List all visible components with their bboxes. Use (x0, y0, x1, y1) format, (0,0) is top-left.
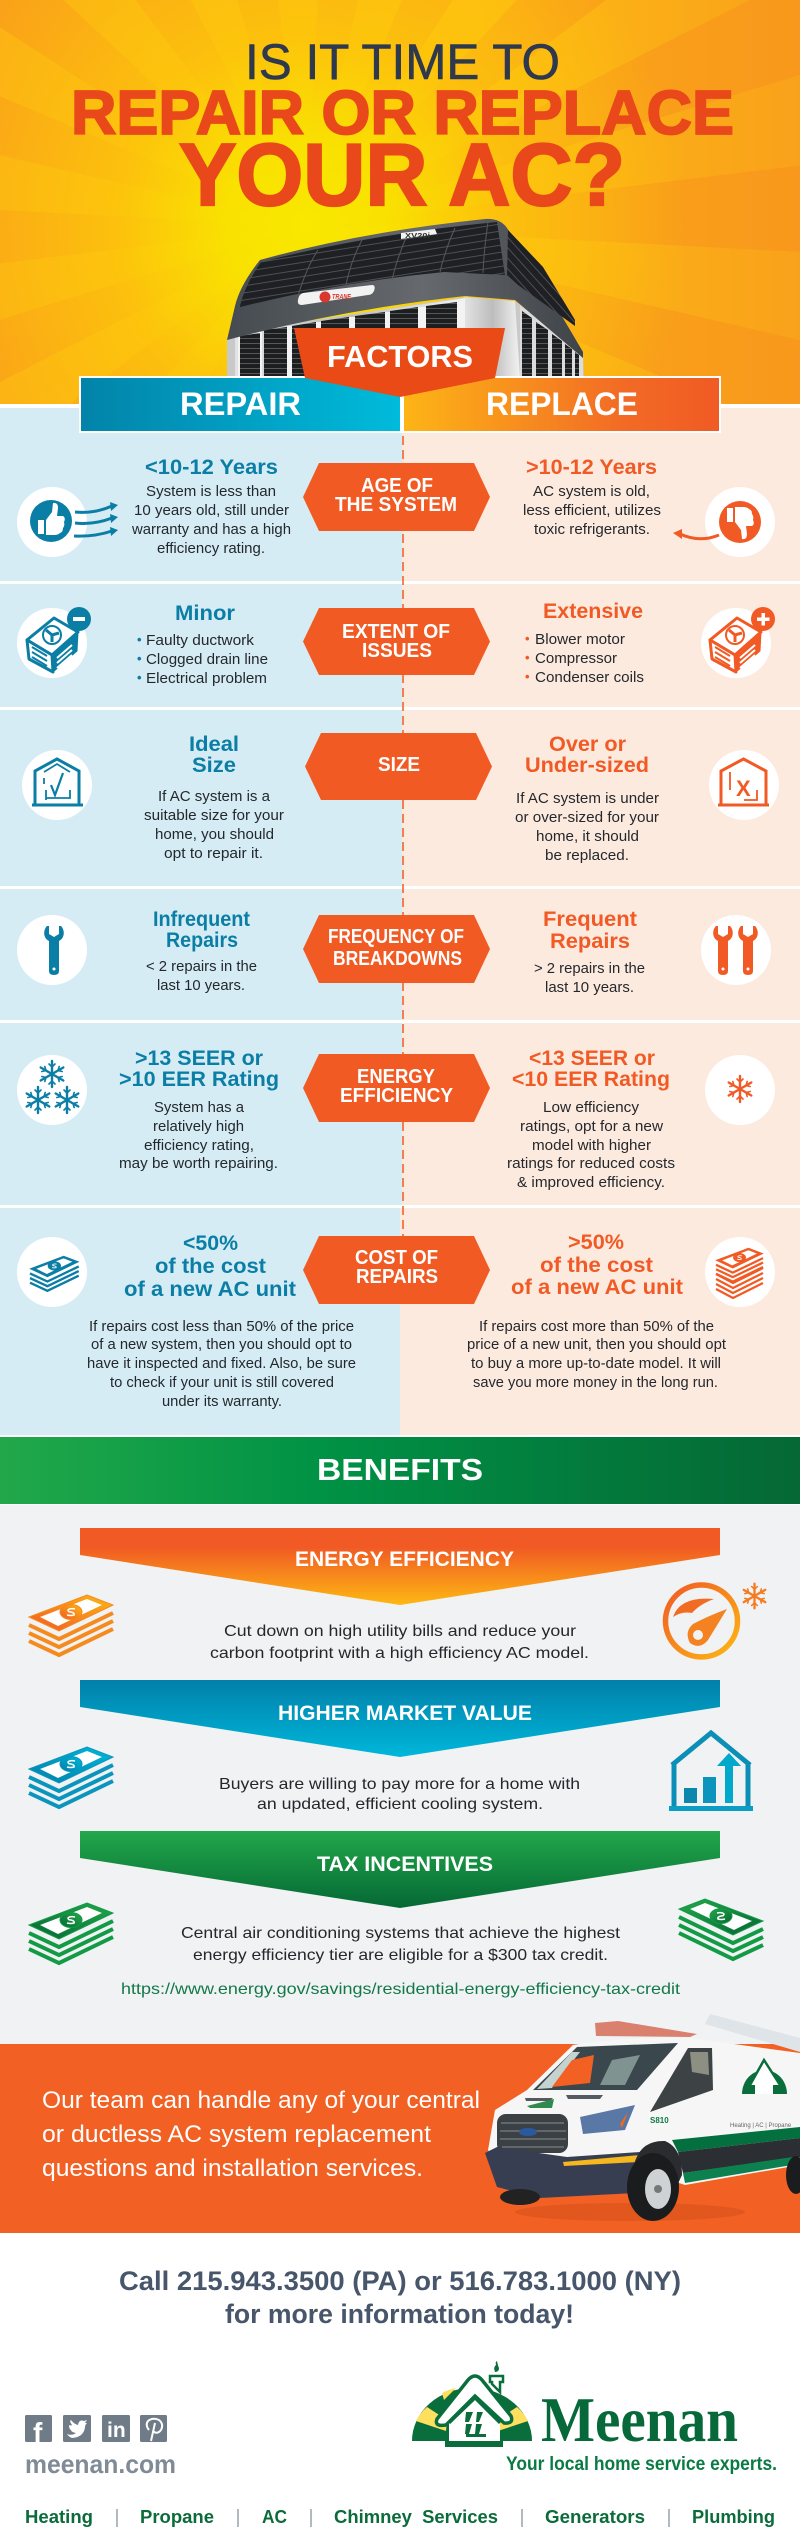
replace description: save you more money in the long run. (473, 1374, 718, 1391)
row: energy efficiency (17, 1047, 775, 1191)
replace description: to buy a more up-to-date model. It will (471, 1355, 721, 1372)
icon: pinterest (140, 2415, 167, 2442)
repair heading: Repairs (166, 929, 238, 952)
benefit description: carbon footprint with a high efficiency AC model. (210, 1645, 589, 1662)
repair description: If repairs cost less than 50% of the price (89, 1318, 354, 1335)
row: age of the system (17, 456, 775, 557)
replace description: toxic refrigerants. (534, 521, 650, 538)
team message (42, 2087, 480, 2182)
benefit description (210, 1623, 589, 1662)
benefit: tax incentives (29, 1831, 763, 1998)
repair description: System has a (154, 1099, 245, 1116)
repair heading: <50% (183, 1232, 238, 1255)
icon: single wrench (17, 915, 87, 985)
icon: house X: X (736, 776, 751, 801)
repair heading (153, 908, 250, 952)
repair header (80, 377, 401, 432)
repair description: suitable size for your (144, 807, 284, 824)
factor: extent of issues: ISSUES (362, 640, 432, 662)
repair heading: Minor (175, 602, 235, 625)
replace description: home, it should (536, 828, 639, 845)
repair description: relatively high (153, 1118, 244, 1135)
replace description: price of a new unit, then you should opt (467, 1336, 727, 1353)
row: size (22, 733, 779, 864)
website: meenan.com (25, 2449, 176, 2479)
replace list: Compressor (535, 650, 617, 667)
icon: linkedin: in (107, 2419, 126, 2442)
AC unit illustration: TRANE (332, 294, 351, 301)
replace heading: Frequent (543, 908, 637, 931)
icon: house check (22, 750, 92, 820)
services navigation: Heating (25, 2507, 93, 2527)
icon: green cash right (679, 1899, 763, 1959)
repair description: under its warranty. (162, 1393, 282, 1410)
repair description: of a new system, then you should opt to (91, 1336, 352, 1353)
hero sunburst background (0, 0, 800, 404)
repair description: 10 years old, still under (134, 502, 289, 519)
arrow banner (80, 1680, 720, 1757)
repair description: may be worth repairing. (119, 1155, 278, 1172)
repair description (87, 1318, 356, 1410)
replace heading: of a new AC unit (511, 1276, 683, 1299)
factor: extent of issues: EXTENT OF (342, 621, 450, 643)
benefit description: Cut down on high utility bills and reduce your (224, 1623, 577, 1640)
icon: facebook: f (33, 2417, 43, 2448)
repair heading (189, 733, 239, 777)
factor: extent of issues (303, 608, 490, 675)
icon: three snowflakes (17, 1055, 87, 1125)
services navigation: Generators (545, 2507, 645, 2527)
repair label: REPAIR (180, 386, 301, 422)
replace heading (512, 1047, 670, 1091)
repair list: Electrical problem (146, 670, 267, 687)
repair description (146, 958, 257, 994)
benefit title: TAX INCENTIVES (317, 1853, 493, 1876)
benefit description: an updated, efficient cooling system. (257, 1796, 543, 1813)
replace header (403, 377, 720, 432)
icon: large cash stack (705, 1237, 775, 1307)
Meenan logo (412, 2361, 777, 2475)
call to action: Call 215.943.3500 (PA) or 516.783.1000 (NY) (119, 2266, 681, 2296)
icon: linkedin (102, 2415, 130, 2442)
factor: energy efficiency (303, 1054, 490, 1122)
call to action (119, 2266, 681, 2329)
factor: frequency of breakdowns: FREQUENCY OF (328, 926, 464, 948)
replace list: • (525, 669, 530, 684)
service van: S810 (650, 2116, 669, 2125)
services navigation: AC (262, 2507, 287, 2527)
replace heading: Extensive (543, 600, 643, 623)
factor: energy efficiency: ENERGY (357, 1066, 436, 1088)
replace description: & improved efficiency. (517, 1174, 665, 1191)
call to action: for more information today! (225, 2299, 574, 2329)
icon: AC unit plus (701, 607, 775, 678)
factor: cost of repairs: COST OF (355, 1247, 438, 1269)
benefits banner (0, 1437, 800, 1504)
services navigation: Plumbing (692, 2507, 775, 2527)
factor: age of the system: THE SYSTEM (335, 494, 457, 516)
repair heading: Ideal (189, 733, 239, 756)
replace label: REPLACE (486, 386, 638, 422)
factors pennant (294, 328, 505, 397)
replace heading (525, 733, 649, 777)
repair description (131, 483, 291, 557)
title line 3: YOUR AC? (179, 125, 625, 224)
replace description (515, 790, 659, 864)
replace heading: >50% (568, 1231, 624, 1254)
repair description: < 2 repairs in the (146, 958, 257, 975)
factor: cost of repairs: REPAIRS (356, 1266, 438, 1288)
replace list: • (525, 631, 530, 646)
replace description: AC system is old, (533, 483, 650, 500)
factor: energy efficiency: EFFICIENCY (340, 1085, 454, 1107)
row: extent of issues (17, 600, 775, 687)
factor: frequency of breakdowns (303, 915, 490, 983)
factor: size (305, 733, 492, 800)
repair description: efficiency rating. (157, 540, 265, 557)
replace list: Condenser coils (535, 669, 644, 686)
services navigation (25, 2507, 775, 2527)
replace description: last 10 years. (545, 979, 634, 996)
factor: frequency of breakdowns: BREAKDOWNS (333, 948, 462, 970)
replace description: If repairs cost more than 50% of the (479, 1318, 714, 1335)
factor: age of the system: AGE OF (361, 475, 433, 497)
logo wordmark: Meenan (541, 2384, 738, 2455)
repair description: efficiency rating, (144, 1137, 254, 1154)
icon: one snowflake (705, 1055, 775, 1125)
repair description: to check if your unit is still covered (110, 1374, 334, 1391)
arrow banner (80, 1831, 720, 1908)
benefit: higher market value (29, 1680, 753, 1813)
repair description: System is less than (146, 483, 276, 500)
icon: house X (709, 750, 779, 820)
icon: AC unit minus (17, 607, 91, 678)
repair panel background (0, 408, 402, 1435)
replace description: be replaced. (545, 847, 629, 864)
services navigation: Chimney Services (334, 2507, 498, 2527)
benefits section background (0, 1505, 800, 2044)
replace heading: >10-12 Years (526, 456, 657, 479)
replace description: ratings for reduced costs (507, 1155, 675, 1172)
replace description: Low efficiency (543, 1099, 639, 1116)
van logo (742, 2060, 787, 2094)
replace heading (543, 908, 637, 953)
icon: thumbs up (17, 487, 118, 557)
factor: cost of repairs (303, 1236, 490, 1304)
replace list: Blower motor (535, 631, 625, 648)
icon: facebook (25, 2415, 52, 2448)
benefit description (219, 1776, 580, 1813)
replace description: less efficient, utilizes (523, 502, 661, 519)
repair list: • (137, 632, 142, 647)
repair list: • (137, 670, 142, 685)
repair heading: of a new AC unit (124, 1278, 296, 1301)
benefit: energy efficiency (29, 1528, 765, 1662)
repair list: Faulty ductwork (146, 632, 255, 649)
replace heading: Over or (549, 733, 626, 756)
replace description: > 2 repairs in the (534, 960, 645, 977)
benefit title: ENERGY EFFICIENCY (295, 1548, 514, 1571)
replace description: If AC system is under (516, 790, 659, 807)
title (71, 34, 734, 224)
benefit title: HIGHER MARKET VALUE (278, 1702, 532, 1725)
replace description: or over-sized for your (515, 809, 659, 826)
factor: size: SIZE (378, 754, 420, 776)
arrow banner (80, 1528, 720, 1605)
repair description: last 10 years. (157, 977, 245, 994)
replace heading: <13 SEER or (529, 1047, 655, 1070)
icon: gauge with snowflake (666, 1584, 765, 1657)
source link: https://www.energy.gov/savings/residential-energy-efficiency-tax-credit (121, 1981, 681, 1998)
icon: house with rising chart (669, 1733, 753, 1811)
replace description (523, 483, 661, 538)
team message: Our team can handle any of your central (42, 2087, 480, 2114)
service van (485, 2014, 800, 2221)
title line 1: IS IT TIME TO (245, 34, 560, 90)
repair list: • (137, 651, 142, 666)
repair description (119, 1099, 278, 1172)
services navigation: Propane (140, 2507, 214, 2527)
repair heading: >10 EER Rating (119, 1068, 279, 1091)
replace panel background (402, 408, 800, 1435)
AC unit illustration (227, 219, 584, 378)
replace heading (511, 1231, 683, 1299)
service van: Heating | AC | Propane (730, 2123, 792, 2129)
icon: two wrenches (701, 915, 771, 985)
replace heading: of the cost (540, 1254, 653, 1277)
row: frequency of breakdowns (17, 908, 771, 996)
repair heading: >13 SEER or (135, 1047, 263, 1070)
row: cost of repairs (17, 1231, 775, 1410)
icon: small cash stack (17, 1237, 87, 1307)
repair heading: Infrequent (153, 908, 250, 931)
repair description: opt to repair it. (164, 845, 263, 862)
factor: age of the system (303, 463, 490, 531)
repair description: have it inspected and fixed. Also, be sure (87, 1355, 356, 1372)
repair description (144, 788, 284, 862)
replace list: • (525, 650, 530, 665)
replace heading: Under-sized (525, 754, 649, 777)
icon: orange cash (29, 1595, 113, 1655)
replace list (525, 631, 644, 686)
icon: twitter (63, 2415, 91, 2442)
repair heading (119, 1047, 279, 1091)
replace description (467, 1318, 727, 1391)
team banner (0, 2044, 800, 2233)
benefit description (181, 1925, 621, 1964)
replace description: model with higher (532, 1137, 651, 1154)
repair heading: of the cost (155, 1255, 266, 1278)
AC unit illustration: XV20i (405, 233, 430, 240)
benefit description: energy efficiency tier are eligible for a $300 tax credit. (193, 1947, 608, 1964)
repair description: home, you should (155, 826, 274, 843)
replace heading: Repairs (550, 930, 630, 953)
benefits heading: BENEFITS (317, 1452, 483, 1487)
team message: questions and installation services. (42, 2155, 423, 2182)
repair list: Clogged drain line (146, 651, 268, 668)
benefit description: Central air conditioning systems that achieve the highest (181, 1925, 621, 1942)
team message: or ductless AC system replacement (42, 2121, 431, 2148)
logo mark (412, 2361, 532, 2447)
replace description (507, 1099, 675, 1191)
replace description: ratings, opt for a new (520, 1118, 663, 1135)
icon: blue cash (29, 1747, 113, 1807)
repair list (137, 632, 268, 687)
repair heading: <10-12 Years (145, 456, 278, 479)
icon: green cash left (29, 1903, 113, 1963)
benefit description: Buyers are willing to pay more for a home with (219, 1776, 580, 1793)
tagline: Your local home service experts. (506, 2454, 777, 2475)
repair description: warranty and has a high (131, 521, 291, 538)
social icons (25, 2415, 167, 2448)
repair heading: Size (192, 754, 236, 777)
replace heading: <10 EER Rating (512, 1068, 670, 1091)
repair heading (124, 1232, 296, 1301)
icon: thumbs down (673, 487, 775, 557)
title line 2: REPAIR OR REPLACE (71, 79, 734, 148)
replace description (534, 960, 645, 996)
factors label: FACTORS (327, 339, 473, 374)
repair description: If AC system is a (158, 788, 271, 805)
